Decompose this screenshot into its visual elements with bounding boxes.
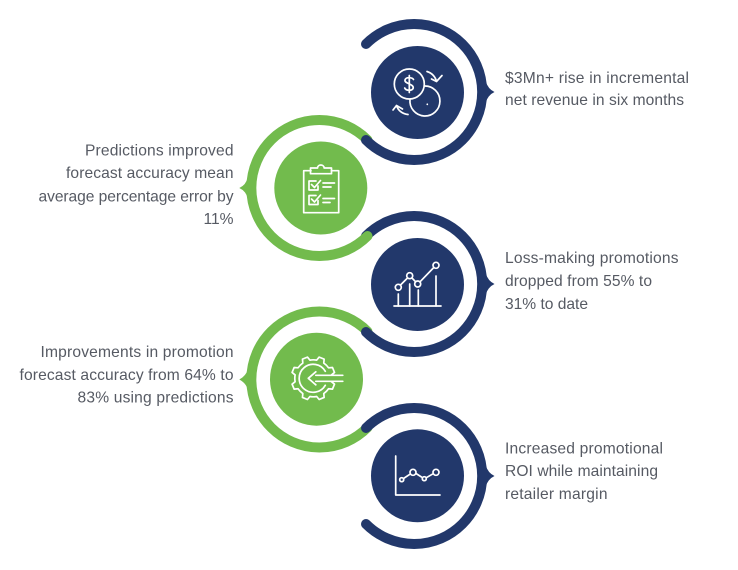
icon: line chart — [396, 456, 440, 495]
disc: step 5 — [371, 429, 464, 522]
ring: step 3 — [366, 216, 482, 352]
text: step 3 — [505, 250, 679, 313]
text: step 2 — [38, 142, 234, 228]
ring: step 2 — [251, 120, 368, 256]
step 1: revenue node — [366, 24, 494, 160]
disc: step 1 — [371, 46, 464, 139]
icon: gear with arrow — [292, 357, 343, 400]
disc: step 3 — [371, 238, 464, 331]
text: step 5: Increased promotional — [505, 440, 663, 458]
text: step 1: $3Mn+ rise in incremental — [505, 70, 689, 87]
step 4: gear node — [239, 312, 368, 447]
text: step 4 — [20, 344, 234, 406]
icon: rising bar and line chart — [394, 262, 441, 306]
text: step 3: 31% to date — [505, 296, 588, 313]
text: step 5: retailer margin — [505, 486, 608, 503]
step 2: clipboard node — [239, 120, 368, 256]
icon: clipboard checklist — [304, 165, 339, 213]
pointer: step 2 — [239, 177, 248, 199]
disc: step 4 — [270, 333, 363, 426]
text: step 5: ROI while maintaining — [505, 463, 658, 480]
ring: step 1 — [366, 24, 482, 160]
pointer: step 1 — [486, 81, 494, 103]
text: step 2: average percentage error by — [38, 188, 234, 206]
text: step 2: Predictions improved — [85, 142, 234, 160]
text: step 4: 83% using predictions — [78, 390, 234, 406]
icon: coins with arrows — [393, 69, 442, 116]
text: step 4: Improvements in promotion — [40, 344, 234, 361]
text: step 1: net revenue in six months — [505, 92, 684, 109]
pointer: step 5 — [486, 465, 494, 487]
ring: step 4 — [251, 312, 368, 447]
text: step 1 — [505, 70, 689, 109]
text: step 2: forecast accuracy mean — [66, 165, 234, 182]
text: step 3: dropped from 55% to — [505, 273, 652, 290]
step 5: line chart node — [366, 408, 494, 544]
text: step 5 — [505, 440, 663, 503]
text: step 3: Loss-making promotions — [505, 250, 679, 267]
text: step 2: 11% — [203, 211, 234, 228]
text: step 4: forecast accuracy from 64% to — [20, 367, 234, 384]
pointer: step 3 — [486, 273, 494, 295]
ring: step 5 — [366, 408, 482, 544]
pointer: step 4 — [239, 369, 248, 390]
step 3: rising chart node — [366, 216, 494, 352]
disc: step 2 — [274, 142, 367, 234]
